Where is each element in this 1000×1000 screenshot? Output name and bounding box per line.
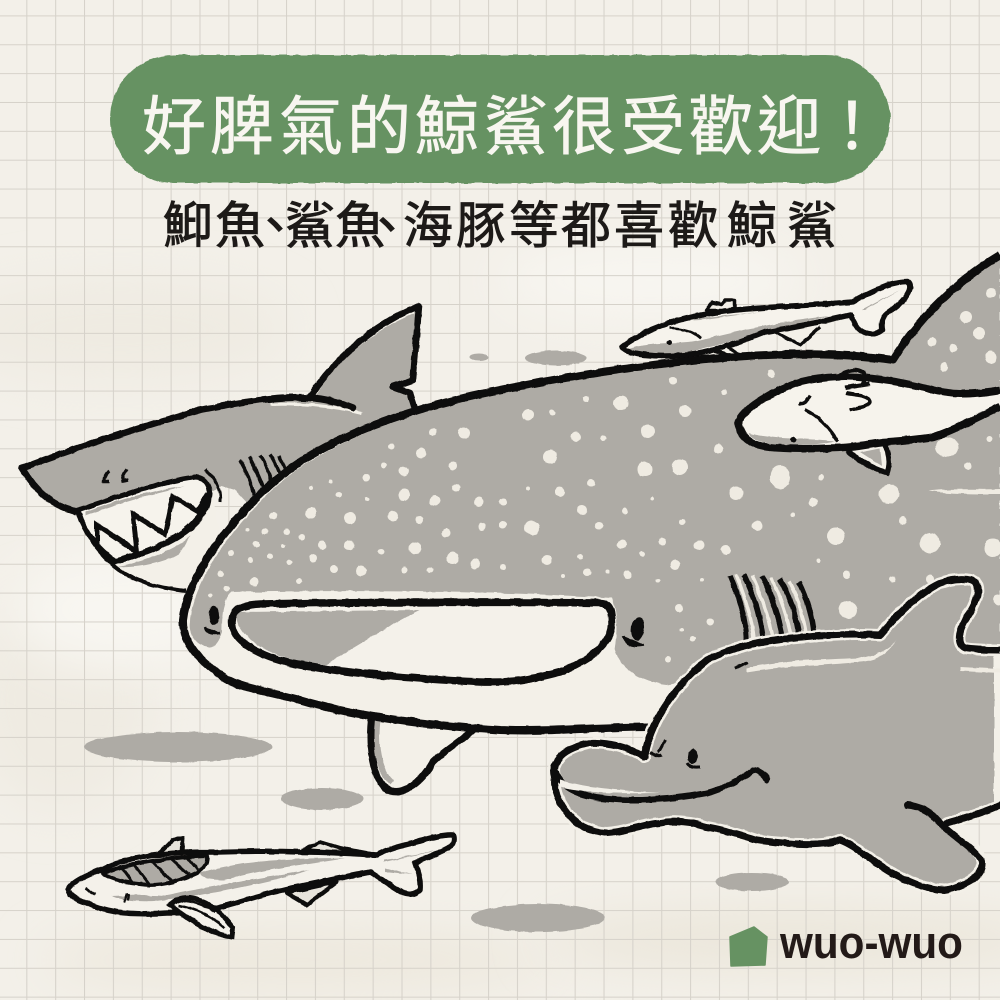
shark teeth xyxy=(97,494,208,552)
logo xyxy=(730,917,963,968)
fish dorsal fin xyxy=(835,370,870,410)
fish body xyxy=(738,377,1000,449)
remora eye, mouth and fin rays xyxy=(85,888,225,928)
remora body xyxy=(68,835,454,914)
remora fins xyxy=(158,838,377,905)
shark jaw crease xyxy=(205,470,220,502)
whale shark upper grey skin xyxy=(190,258,1000,685)
remora body xyxy=(622,282,910,356)
shark body xyxy=(22,306,420,511)
dolphin smile xyxy=(556,770,767,800)
subtitle: 鮣魚、鯊魚、海豚等都喜歡鯨鯊 xyxy=(163,198,837,254)
shark mouth xyxy=(75,477,209,562)
whale shark mouth outline xyxy=(232,602,612,682)
shark outline xyxy=(22,306,419,511)
title text: 好脾氣的鯨鯊很受歡迎！ xyxy=(142,91,884,163)
dolphin outline xyxy=(644,579,1000,757)
dolphin eye and blowhole xyxy=(650,662,748,767)
remora sucker stripes xyxy=(122,857,198,885)
remora pectoral fin xyxy=(170,898,233,937)
great white shark xyxy=(22,306,420,592)
remora outline xyxy=(622,282,910,356)
remora gill and eye xyxy=(670,328,701,338)
dolphin body xyxy=(554,579,1000,890)
whale shark gills xyxy=(730,575,814,645)
remora shade xyxy=(628,290,900,354)
fish outline xyxy=(738,377,1000,449)
small remora above whale shark xyxy=(622,282,910,358)
fish gill and eye xyxy=(799,395,838,442)
dolphin beak highlight xyxy=(560,780,660,793)
gill highlights xyxy=(736,574,806,642)
shark mouth shade xyxy=(85,486,190,567)
shark nostrils xyxy=(104,469,128,481)
title banner xyxy=(110,55,890,183)
dolphin back highlights xyxy=(746,640,1000,673)
whale shark outline xyxy=(183,255,1000,730)
whale shark side highlight xyxy=(928,489,1000,494)
whale shark xyxy=(183,255,1000,731)
shark gills xyxy=(240,455,287,495)
remora fins xyxy=(706,300,820,358)
fish belly shade xyxy=(748,405,1000,445)
whale shark eyes xyxy=(205,607,644,646)
logo house icon xyxy=(730,927,767,966)
whale shark spots xyxy=(208,288,1000,662)
dolphin lower outline xyxy=(554,743,1000,890)
whale shark mouth shade xyxy=(236,610,420,667)
dolphin xyxy=(554,579,1000,890)
water shadow blobs xyxy=(84,350,789,932)
whale shark mouth xyxy=(232,602,612,682)
fish fin xyxy=(847,440,889,473)
shark chin xyxy=(78,500,208,591)
bottom remora xyxy=(68,835,454,937)
whale shark body silhouette xyxy=(183,354,1000,731)
shark dorsal highlight xyxy=(270,312,414,413)
banner pill xyxy=(110,55,890,183)
shark lower jaw xyxy=(78,480,220,592)
remora outline xyxy=(68,835,454,914)
large remora on whale shark xyxy=(738,370,1000,473)
remora shading xyxy=(112,850,440,901)
logo wordmark: wuo-wuo xyxy=(779,917,963,968)
remora sucker disc xyxy=(103,856,207,885)
whale shark pectoral fin xyxy=(371,715,473,791)
